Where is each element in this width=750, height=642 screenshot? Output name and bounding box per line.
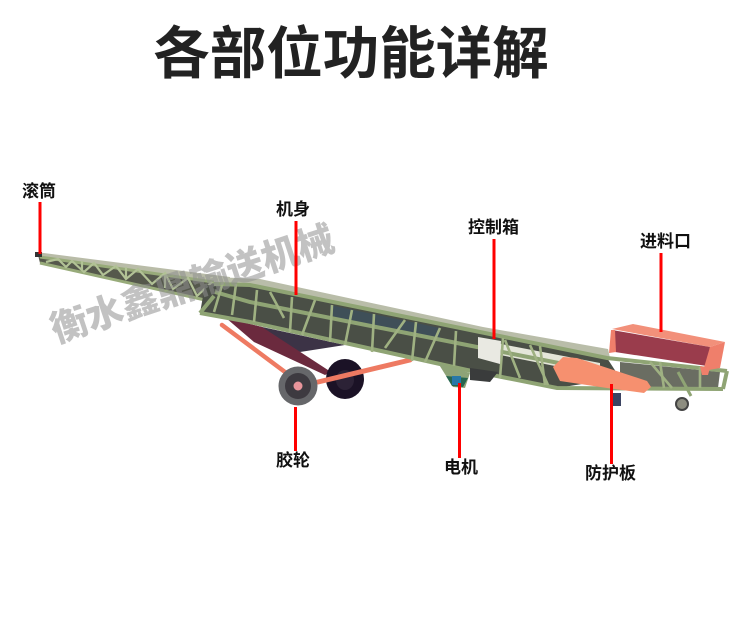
dark strut and chassis shadow bbox=[226, 318, 345, 375]
rear tail section of frame bbox=[35, 252, 230, 300]
back wheel bbox=[326, 359, 364, 399]
callout: roller: 滚筒 bbox=[22, 181, 56, 201]
callout: machine body: 机身 bbox=[276, 200, 310, 219]
callout: motor: 电机 bbox=[444, 458, 478, 477]
callout: control box: 控制箱 bbox=[468, 218, 519, 237]
control box bbox=[478, 337, 501, 364]
callout: machine body bbox=[276, 200, 310, 295]
title: 各部位功能详解 bbox=[153, 22, 549, 85]
callout: rubber wheel bbox=[276, 407, 310, 470]
callout: control box bbox=[468, 218, 519, 339]
belt conveyor machine bbox=[35, 252, 727, 410]
callout: roller bbox=[22, 181, 56, 254]
protective guard plate bbox=[553, 357, 651, 393]
watermark: 衡水鑫鼎输送机械 bbox=[45, 217, 339, 351]
callout: motor bbox=[444, 383, 478, 477]
callout: feed inlet: 进料口 bbox=[640, 232, 691, 251]
callout: guard plate bbox=[585, 384, 636, 483]
front rubber wheel bbox=[278, 366, 318, 406]
red support arms bbox=[222, 325, 410, 382]
callout: feed inlet bbox=[640, 232, 691, 332]
leg and caster bbox=[613, 372, 691, 410]
feed hopper bbox=[609, 324, 725, 375]
callout: rubber wheel: 胶轮 bbox=[276, 450, 310, 470]
main truss frame bbox=[200, 277, 727, 389]
motor and mount bbox=[438, 363, 498, 388]
callout: guard plate: 防护板 bbox=[585, 463, 636, 483]
